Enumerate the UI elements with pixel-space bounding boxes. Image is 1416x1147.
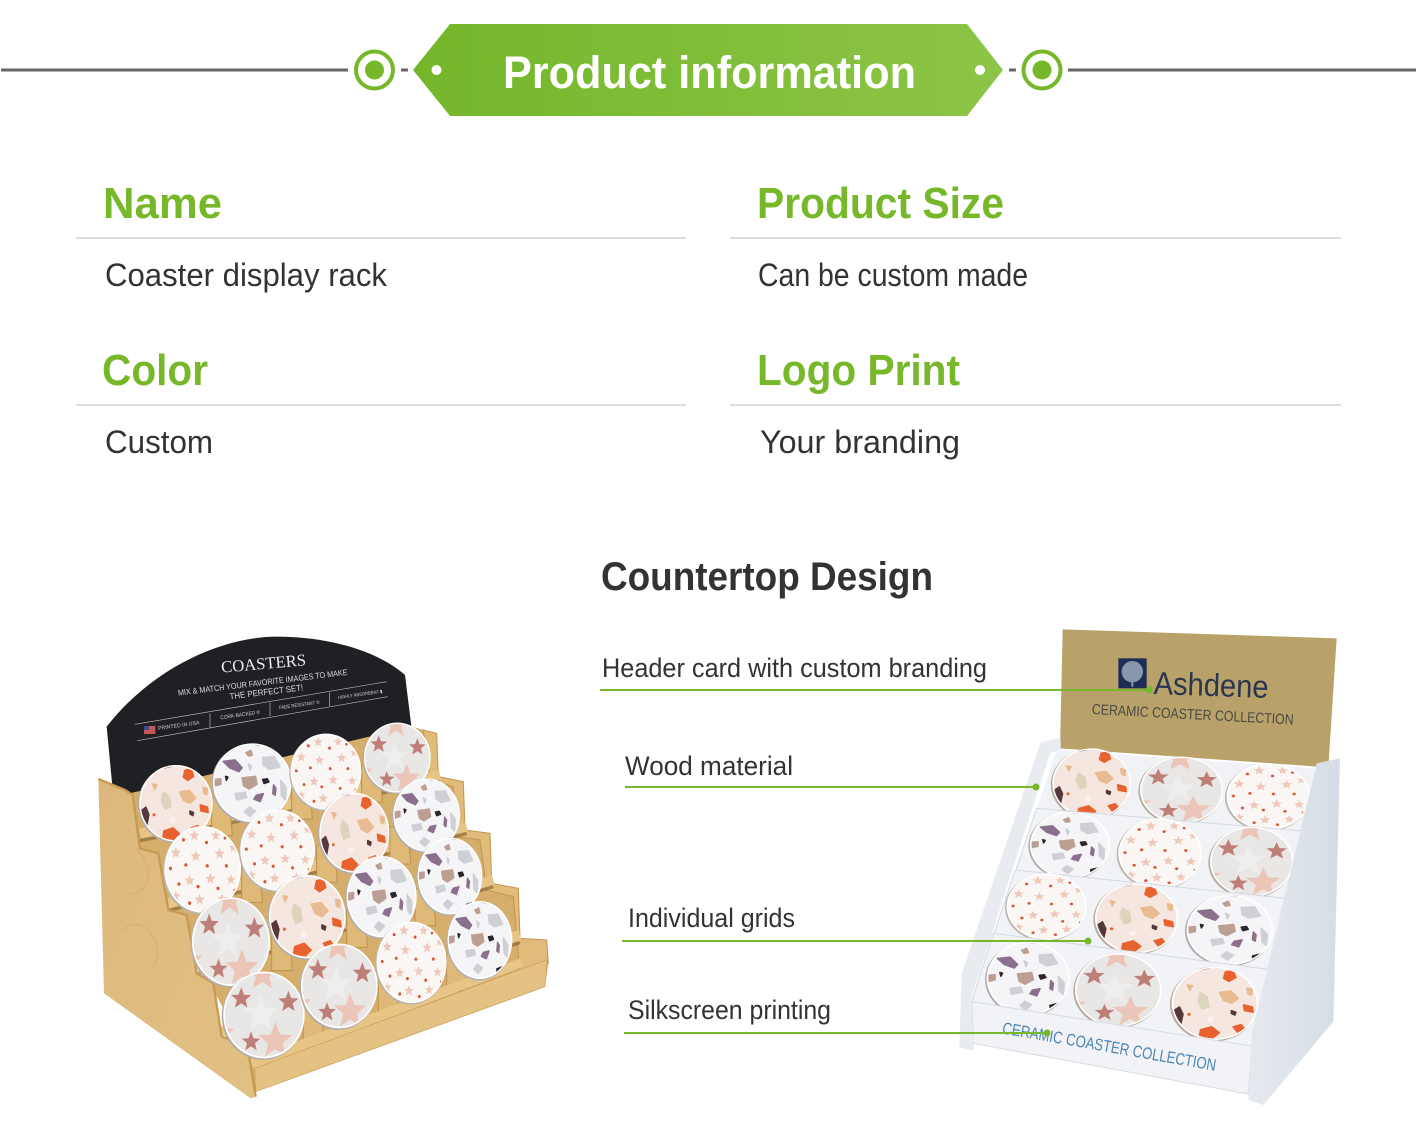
black header sign: THE PERFECT SET!: [229, 682, 304, 701]
leader line: [624, 1032, 1047, 1034]
coasters row 4: [214, 894, 512, 1060]
right dash: [1009, 68, 1016, 72]
right dot: [975, 65, 985, 75]
divider: [76, 404, 686, 406]
leader dot: [1032, 784, 1040, 790]
value: Custom: [105, 424, 213, 460]
shelf wall 2: [972, 808, 1310, 1047]
leader line: [600, 689, 1149, 691]
panel: logo print: [730, 346, 1341, 460]
leader dot: [1044, 1030, 1050, 1036]
label: Silkscreen printing: [628, 995, 831, 1025]
front lip: [255, 960, 547, 1092]
black header sign: HIGHLY ABSORBENT ▮: [337, 689, 383, 700]
black header sign: CORK-BACKED ®: [220, 709, 261, 721]
coasters row 2: [163, 772, 460, 914]
black header sign: MIX & MATCH YOUR FAVORITE IMAGES TO MAKE: [177, 667, 348, 698]
wooden coaster rack photo: [98, 637, 548, 1098]
rack interior and far side: [130, 727, 548, 1092]
callout: header card: [600, 653, 1152, 694]
label: Individual grids: [628, 903, 795, 933]
black header sign: FADE RESISTANT ®: [279, 699, 320, 711]
left dash: [401, 68, 408, 72]
right rule: [1068, 68, 1416, 72]
leader line: [622, 940, 1088, 942]
card tagline: CERAMIC COASTER COLLECTION: [1091, 702, 1294, 729]
value: Coaster display rack: [105, 257, 388, 293]
section heading: Countertop Design: [601, 555, 933, 599]
back wall: [972, 750, 1315, 1047]
front lip with print: CERAMIC COASTER COLLECTION: [1001, 1019, 1218, 1075]
callout: individual grids: [622, 903, 1092, 944]
label: Header card with custom branding: [602, 653, 987, 683]
header banner: [1, 24, 1416, 116]
left target icon: [356, 52, 393, 88]
divider tabs: [212, 765, 467, 1042]
left rule: [1, 68, 348, 72]
callout: silkscreen printing: [624, 995, 1050, 1036]
brand name: Ashdene: [1153, 665, 1269, 705]
left dot: [432, 65, 442, 75]
row 2 coasters: [1028, 806, 1293, 898]
leader line: [625, 786, 1036, 788]
right target icon: [1024, 52, 1060, 88]
black header sign: [107, 637, 413, 797]
coasters row 1: [138, 711, 431, 843]
row 4 coasters: [985, 935, 1258, 1041]
shelf wall 4: [972, 933, 1268, 1047]
right side panel: [1248, 758, 1340, 1105]
front tread: [247, 958, 523, 1069]
stepped side panel: [98, 779, 256, 1098]
row 1 coasters: [1051, 744, 1310, 831]
divider: [76, 237, 686, 239]
title: Product information: [503, 47, 916, 98]
logo mark: [1118, 658, 1147, 688]
panel: product size: [730, 179, 1341, 293]
front lip with print: [972, 1002, 1252, 1094]
shelf wall 3: [972, 870, 1287, 1047]
heading: Product Size: [757, 179, 1004, 228]
row 3 coasters: [1005, 873, 1273, 966]
divider: [730, 237, 1341, 239]
leader dot: [1146, 686, 1152, 694]
black header sign: PRINTED IN USA: [158, 720, 200, 732]
kraft header card: [1060, 629, 1337, 767]
green hexagon: [413, 24, 1003, 116]
black header sign: COASTERS: [220, 650, 307, 677]
left side panel: [959, 737, 1061, 1051]
heading: Logo Print: [757, 346, 960, 395]
panel: name: [76, 179, 686, 293]
callout: wood material: [625, 751, 1040, 790]
value: Can be custom made: [758, 257, 1028, 293]
leader dot: [1084, 938, 1092, 944]
heading: Name: [103, 179, 222, 228]
coasters row 3: [183, 831, 482, 988]
value: Your branding: [760, 424, 960, 460]
white coaster rack photo: [959, 629, 1340, 1105]
divider: [730, 404, 1341, 406]
label: Wood material: [625, 751, 793, 781]
heading: Color: [102, 346, 208, 395]
panel: color: [76, 346, 686, 460]
